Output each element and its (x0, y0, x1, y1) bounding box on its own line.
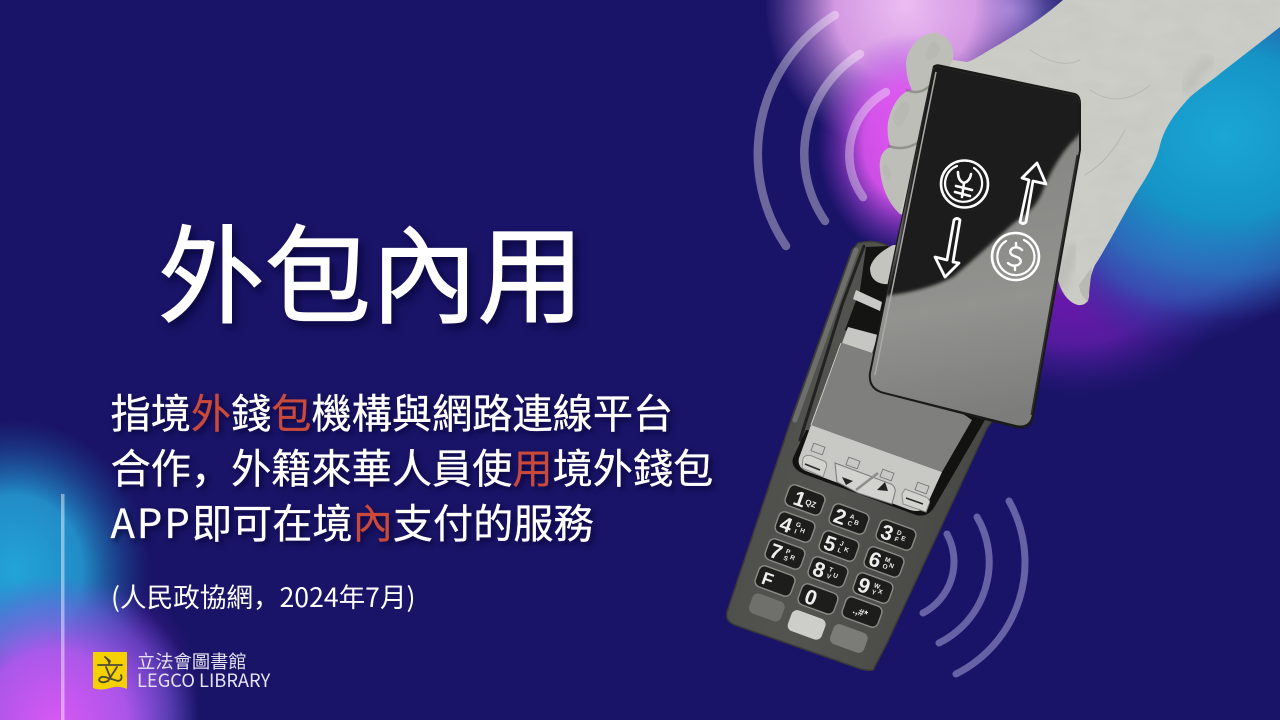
terminal keypad: J (839, 540, 845, 548)
terminal keypad: F (893, 536, 899, 544)
icon: yen coin (941, 160, 988, 208)
terminal keypad: .,#* (851, 605, 869, 621)
logo text: 立法會圖書館 (137, 648, 247, 674)
hand silhouette (880, 0, 1280, 305)
terminal keypad: A (849, 513, 856, 522)
fingers shading (880, 33, 953, 214)
terminal keypad: 4 (776, 512, 796, 538)
signal arcs: lower right (923, 501, 1025, 674)
terminal keypad: 7 (766, 539, 785, 565)
terminal keypad: 9 (854, 573, 873, 599)
icon: dollar coin (992, 233, 1039, 280)
terminal keypad: C (846, 520, 853, 528)
terminal keypad: 8 (809, 557, 829, 583)
background glow: top pink (700, 0, 1120, 300)
smartphone (868, 64, 1081, 428)
terminal keypad: G (795, 521, 802, 530)
logo text (137, 648, 270, 693)
terminal keypad: F (759, 568, 776, 591)
terminal soft keys (802, 443, 930, 512)
divider: vertical line (61, 494, 64, 720)
terminal keypad: E (900, 535, 907, 543)
payment terminal (727, 242, 1000, 670)
terminal keypad: 0 (801, 585, 820, 611)
terminal keypad: L (836, 547, 842, 555)
terminal keypad: O (881, 563, 888, 571)
terminal keypad: 3 (877, 520, 896, 546)
terminal keypad: 5 (820, 531, 840, 557)
phone screen (870, 66, 1080, 426)
terminal keypad: 6 (865, 547, 884, 573)
definition text: APP即可在境內支付的服務 (110, 491, 594, 550)
terminal function keys (747, 592, 869, 654)
terminal keypad: U (832, 572, 839, 580)
terminal keypad: V (825, 573, 832, 581)
terminal keypad: 1 (790, 487, 809, 513)
arrow: up (1020, 163, 1046, 224)
terminal keypad: B (853, 519, 860, 527)
terminal keypad (753, 483, 918, 629)
phone outline (869, 64, 1081, 428)
terminal rim (795, 246, 864, 440)
terminal keypad: S (782, 555, 789, 563)
definition text: 指境外錢包機構與網路連線平台 (110, 381, 673, 440)
terminal keypad: QZ (804, 498, 818, 510)
arrow: down (935, 218, 960, 277)
terminal screen bezel (792, 345, 985, 516)
terminal keypad: W (873, 582, 882, 591)
terminal keypad: X (877, 588, 884, 596)
terminal keypad: R (789, 554, 796, 562)
terminal keypad: D (896, 529, 903, 538)
logo text: LEGCO LIBRARY (137, 667, 270, 693)
terminal soft-key panel (799, 425, 942, 511)
left rim highlight (875, 72, 936, 375)
terminal keypad: N (888, 562, 895, 570)
fingernails (883, 42, 1092, 302)
definition text (110, 381, 716, 550)
terminal keypad: 2 (830, 504, 849, 530)
logo: flag emblem (93, 652, 127, 690)
hand shading (889, 50, 1208, 285)
terminal keypad: I (793, 528, 797, 536)
source citation: (人民政協網，2024年7月) (111, 576, 416, 615)
terminal screen (811, 343, 972, 472)
definition text: 合作，外籍來華人員使用境外錢包 (110, 436, 713, 495)
terminal body (727, 242, 1000, 670)
terminal keypad: H (799, 527, 806, 535)
terminal keypad: T (828, 566, 834, 574)
terminal keypad: Y (870, 589, 877, 597)
hand holding phone (870, 0, 1280, 305)
finger on terminal (870, 245, 905, 285)
background glow: lower left blue and pink (0, 400, 240, 720)
background glow: right blue and purple (900, 0, 1280, 420)
hand skin texture (960, 0, 1280, 305)
terminal keypad: P (785, 548, 792, 557)
title: 外包內用 (158, 190, 584, 345)
terminal keypad: K (843, 546, 850, 554)
terminal keypad: M (884, 556, 891, 565)
terminal head (842, 246, 905, 353)
signal arcs: upper left (758, 15, 886, 246)
dark reflection (885, 60, 1085, 296)
